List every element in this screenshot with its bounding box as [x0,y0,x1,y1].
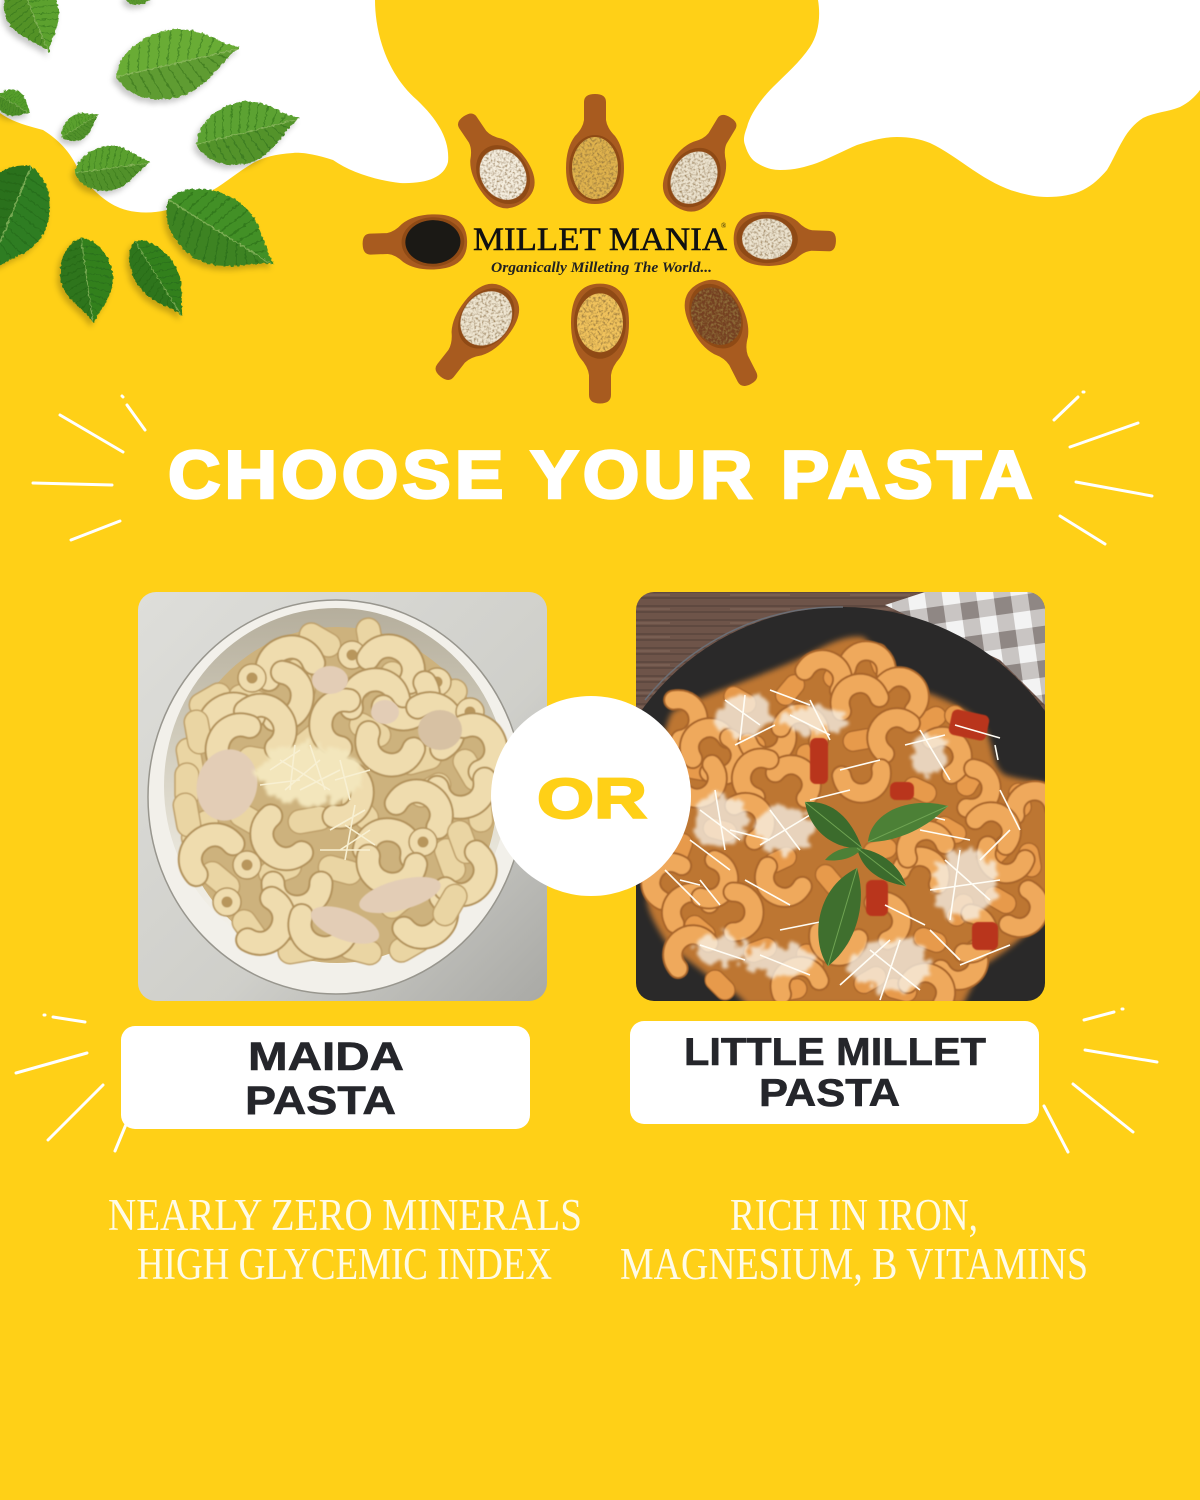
label text line 1: LITTLE MILLET [684,1031,986,1074]
logo tagline: Organically Milleting The World... [491,260,712,276]
facts line 2: HIGH GLYCEMIC INDEX [137,1239,552,1289]
leaf: top small tip [125,0,156,5]
label: little millet pasta [630,1021,1039,1124]
leaf: lower small [55,234,119,327]
spoon: top left [441,101,545,218]
leaf: top left [0,0,73,62]
leaf: small edge [0,84,37,124]
label text line 2: PASTA [245,1079,396,1123]
leaf: lower large [150,169,293,295]
leaf: small middle [56,104,105,148]
spoon: top centre [566,94,624,204]
facts line 1: RICH IN IRON, [730,1190,978,1240]
chicken pieces [189,666,462,951]
heading: CHOOSE YOUR PASTA [168,436,1033,512]
OR circle [491,696,691,896]
checked cloth [885,592,1045,705]
sparks: label left [16,1015,127,1151]
photo: little millet pasta [636,592,1045,1001]
plate [636,607,1045,1001]
macaroni [643,641,1054,1004]
pasta mass [647,637,1050,1005]
tomato pieces [810,708,998,950]
sparks: heading left [33,396,145,540]
spoon: bottom centre [571,284,629,403]
spoon: bottom left [419,273,530,394]
pasta mass [177,627,497,963]
leaf: top large [108,15,248,110]
text: maida pasta facts [108,1190,582,1289]
logo [362,94,837,403]
facts line 2: MAGNESIUM, B VITAMINS [620,1239,1088,1289]
white blob: top right [744,0,1200,197]
label text line 2: PASTA [759,1072,900,1115]
leaf: big left [0,152,65,286]
sparks: heading right [1054,392,1152,544]
photo: maida pasta [138,592,547,1001]
spoon: top right [653,103,754,221]
basil [805,802,948,966]
label text line 1: MAIDA [248,1035,404,1079]
grated cheese [258,745,375,860]
logo registered mark: ® [721,222,727,230]
text: little millet pasta facts [620,1190,1088,1289]
logo wordmark: MILLET MANIA [473,222,727,258]
spoon: right [733,211,837,268]
spoon: left [362,213,468,272]
leaf: upper right [189,89,307,174]
leaf: centre [72,140,154,195]
sparks: label right [1044,1009,1157,1152]
white blob: top left [0,0,448,212]
OR text: OR [537,767,647,831]
facts line 1: NEARLY ZERO MINERALS [108,1190,582,1240]
leaves [0,0,307,327]
macaroni [171,616,502,967]
bowl inner wall [164,608,500,888]
bowl [148,600,524,994]
leaf: lower small right [117,230,200,327]
grated parmesan [665,690,1020,1000]
label: maida pasta [121,1026,530,1129]
spoon: bottom right [675,271,775,397]
